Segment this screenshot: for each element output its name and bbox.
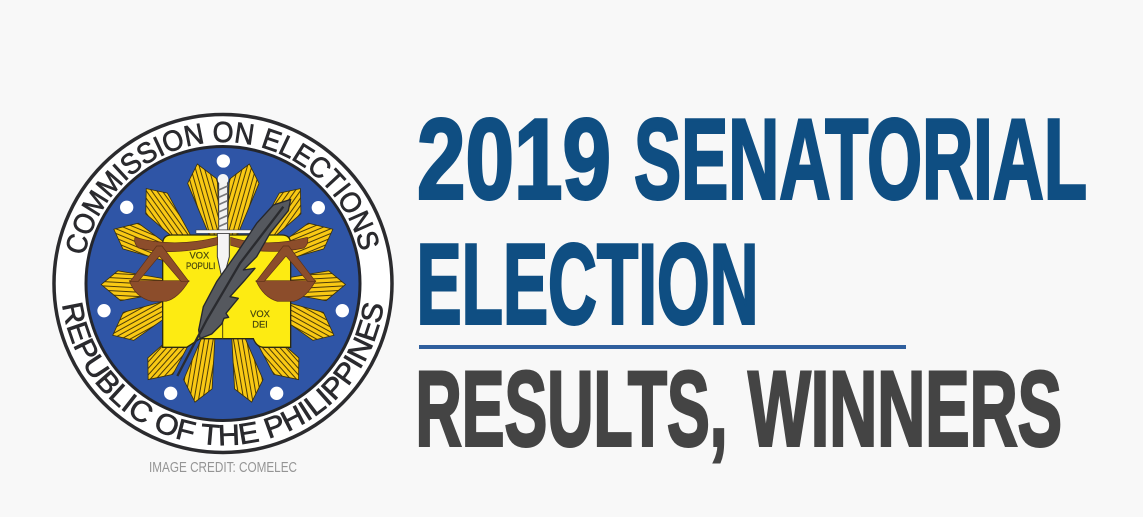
image credit: IMAGE CREDIT: COMELEC <box>149 460 297 476</box>
title line 1: 2019 <box>417 96 611 224</box>
white dots <box>97 154 349 400</box>
book spine <box>221 280 224 339</box>
title line 2: ELECTION <box>416 220 758 348</box>
vox dei label: DEI <box>252 319 268 329</box>
vox populi label: VOX <box>189 251 210 261</box>
emblem artwork <box>97 154 349 406</box>
vox dei label: VOX <box>250 309 271 319</box>
seal outer ring <box>54 114 392 452</box>
quill feather <box>177 199 291 376</box>
sun rays <box>99 164 348 406</box>
vox dei label <box>250 309 271 329</box>
yellow book shield <box>163 235 291 347</box>
title line 1 <box>417 96 1087 224</box>
ring text: top: COMMISSION ON ELECTIONS <box>66 121 379 253</box>
COMELEC seal <box>52 112 394 454</box>
dagger <box>196 174 251 282</box>
vox populi label <box>186 251 215 271</box>
vox populi label: POPULI <box>186 261 215 271</box>
scales of justice <box>129 237 316 301</box>
subtitle: RESULTS, <box>416 348 728 468</box>
divider rule <box>419 345 906 349</box>
seal blue disc <box>86 146 360 420</box>
ring text: bottom: REPUBLIC OF THE PHILIPPINES <box>62 302 383 446</box>
